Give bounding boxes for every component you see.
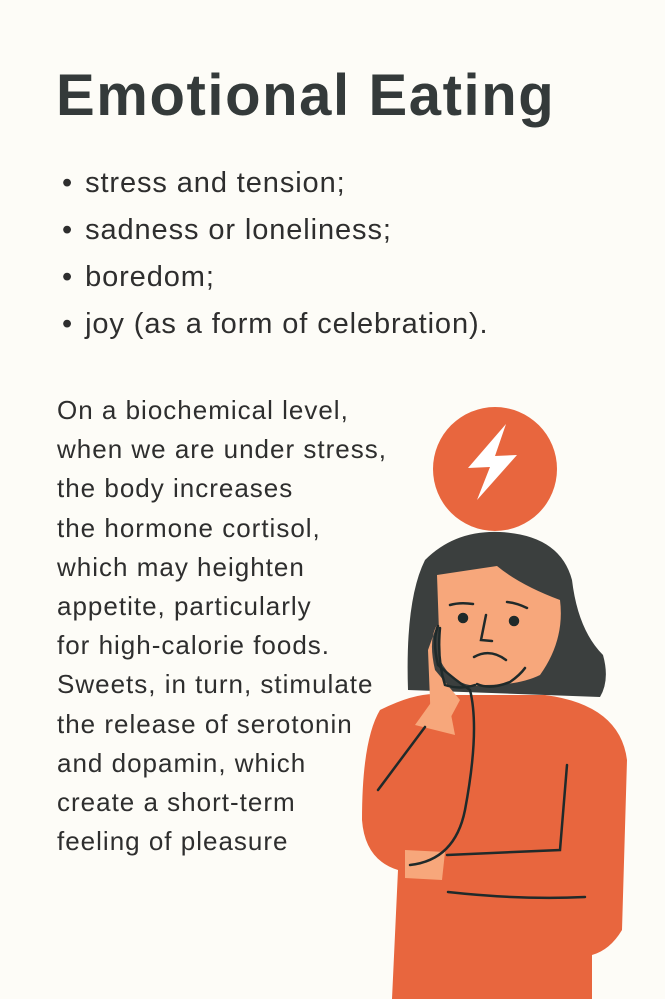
- paragraph text: appetite, particularly: [57, 591, 312, 621]
- paragraph text: when we are under stress,: [57, 434, 387, 464]
- paragraph text: On a biochemical level,: [57, 395, 349, 425]
- bullet list: joy (as a form of celebration).: [85, 308, 489, 340]
- paragraph text: [57, 395, 387, 856]
- paragraph text: which may heighten: [57, 552, 305, 582]
- paragraph text: for high-calorie foods.: [57, 630, 330, 660]
- bullet list: boredom;: [85, 261, 215, 293]
- paragraph text: Sweets, in turn, stimulate: [57, 669, 373, 699]
- icon: lightning circle: [433, 407, 557, 531]
- bullet list: stress and tension;: [85, 167, 346, 199]
- bullet list: sadness or loneliness;: [85, 214, 392, 246]
- title: Emotional Eating: [56, 63, 555, 128]
- paragraph text: the hormone cortisol,: [57, 513, 321, 543]
- paragraph text: and dopamin, which: [57, 748, 306, 778]
- bullet list: [63, 167, 489, 340]
- paragraph text: the body increases: [57, 473, 293, 503]
- paragraph text: create a short-term: [57, 787, 296, 817]
- paragraph text: the release of serotonin: [57, 709, 353, 739]
- paragraph text: feeling of pleasure: [57, 826, 288, 856]
- illustration: stressed woman: [362, 532, 627, 999]
